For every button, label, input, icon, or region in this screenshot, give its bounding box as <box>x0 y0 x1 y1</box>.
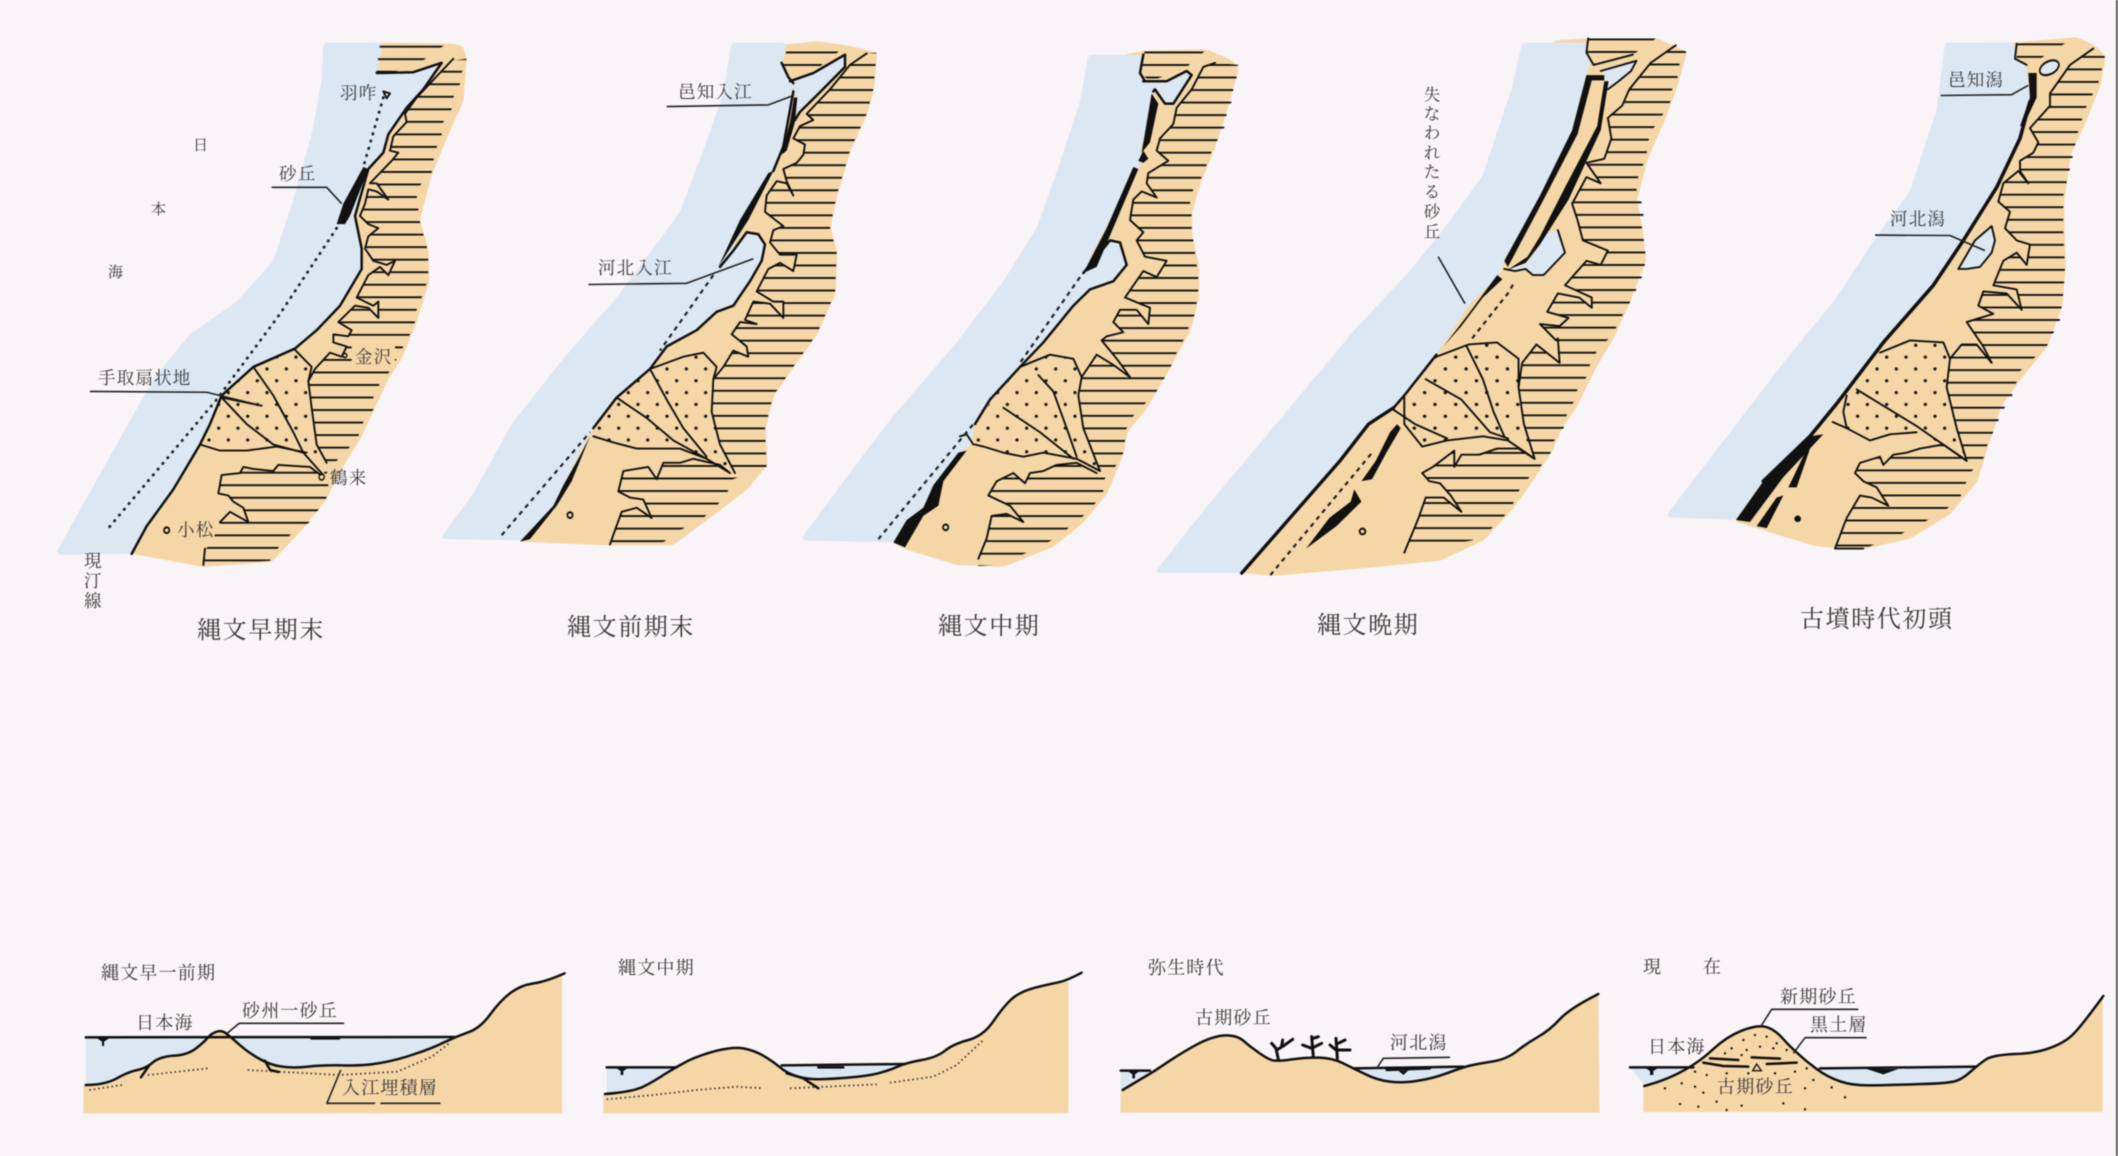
sea <box>800 55 1153 542</box>
coastline <box>1763 102 2030 481</box>
artifact triangle <box>1753 1064 1761 1071</box>
land <box>507 41 877 545</box>
sand dunes <box>1736 434 1823 522</box>
coastline and lagoon outline <box>593 55 845 428</box>
place labels: 手取扇状地 <box>98 368 192 388</box>
sea <box>55 42 442 555</box>
section labels: 現 <box>1643 957 1662 977</box>
panel: section 縄文早一前期 <box>83 963 565 1113</box>
fan: 手取扇状地 <box>593 353 735 473</box>
section labels: 新期砂丘 <box>1780 987 1857 1007</box>
land <box>1643 997 2103 1112</box>
section labels: 入江埋積層 <box>342 1078 438 1098</box>
section labels: 河北潟 <box>1390 1033 1448 1053</box>
town marker <box>567 512 573 518</box>
present shoreline <box>878 277 1080 539</box>
map drawing <box>1154 38 1687 576</box>
land <box>603 982 1068 1113</box>
water surface <box>1121 1067 1463 1071</box>
section labels: 在 <box>1703 957 1722 977</box>
fan boundary and rivers <box>1833 340 1967 461</box>
section labels: 古期砂丘 <box>1195 1008 1272 1028</box>
lake sediment <box>1867 1069 1898 1074</box>
place labels: 河北潟 <box>1890 209 1946 229</box>
lagoon outline <box>1958 226 1995 269</box>
present shoreline <box>1270 281 1515 575</box>
land <box>1733 37 2106 549</box>
section labels: 砂州一砂丘 <box>242 1001 338 1021</box>
place labels <box>598 82 753 278</box>
map drawing <box>1665 37 2106 549</box>
land <box>83 974 562 1113</box>
town marker <box>1360 529 1365 534</box>
hatching: hills <box>782 42 847 75</box>
inner hill boundary <box>308 59 453 381</box>
section drawing <box>603 973 1082 1113</box>
sea label 日本海 <box>108 137 208 281</box>
vertical label 失なわれたる砂丘: な <box>1424 104 1440 124</box>
label 現汀線 <box>84 551 103 611</box>
panel: map 縄文晩期 <box>1154 38 1687 639</box>
inner hill boundary <box>713 53 867 379</box>
water <box>1630 1067 1978 1086</box>
section label: 縄文中期 <box>618 958 695 978</box>
lagoon: 河北潟 <box>1958 226 1995 269</box>
place labels <box>98 83 392 540</box>
fan: 手取扇状地 <box>1404 342 1535 459</box>
place labels <box>1890 70 2004 229</box>
place labels: 小松 <box>177 520 214 540</box>
section labels: 弥生時代 <box>1148 958 1225 978</box>
hatching: hills <box>1586 38 1656 65</box>
panel: section 現在 <box>1630 957 2103 1112</box>
fan boundary and rivers <box>1394 342 1535 459</box>
coastline <box>1242 408 1394 573</box>
hatching: hills <box>376 44 447 74</box>
sea <box>440 42 793 540</box>
sand dunes <box>718 171 773 267</box>
fan: 手取扇状地 <box>1843 340 1967 461</box>
fan: 手取扇状地 <box>975 355 1100 471</box>
leader lines <box>1875 85 2028 251</box>
sea level marker <box>97 1038 109 1046</box>
town marker <box>943 524 948 530</box>
fan boundary and rivers <box>200 350 327 475</box>
coastline and lagoon outline <box>975 55 1192 424</box>
arrow <box>1438 257 1465 304</box>
lagoons <box>1601 61 1636 89</box>
lagoon: 邑知潟 <box>2038 57 2061 78</box>
profile <box>605 973 1082 1094</box>
vertical label 失なわれたる砂丘 <box>1424 86 1441 242</box>
fan: 手取扇状地 <box>200 351 327 463</box>
sand dunes <box>893 451 967 547</box>
section drawing <box>1121 994 1599 1113</box>
leader lines <box>588 96 793 284</box>
sand dots <box>1664 1034 1846 1111</box>
map drawing <box>55 42 467 567</box>
land <box>1242 38 1687 576</box>
lagoon outline <box>1504 38 1636 275</box>
place labels: 砂丘 <box>279 164 316 184</box>
profile <box>1644 996 2103 1086</box>
section drawing <box>1630 996 2103 1112</box>
label 現汀線: 現 <box>84 551 103 571</box>
place labels: 金沢 <box>355 347 392 367</box>
inner hill boundary <box>1950 49 2093 363</box>
town markers <box>383 91 390 98</box>
panel: map 古墳時代初頭 <box>1665 37 2106 633</box>
lagoon: 邑知入江 <box>1143 71 1192 104</box>
land <box>132 42 467 567</box>
sand dunes <box>1444 275 1502 347</box>
buried layer <box>89 1043 449 1090</box>
lake sediment <box>1387 1068 1430 1070</box>
water <box>607 1064 905 1095</box>
water surface <box>607 1064 905 1067</box>
land <box>873 49 1239 567</box>
map drawing <box>800 49 1239 567</box>
place labels: 河北入江 <box>598 258 673 278</box>
buried layer <box>607 1040 983 1099</box>
vertical label 失なわれたる砂丘: れ <box>1424 144 1441 162</box>
fan boundary and rivers <box>593 353 735 473</box>
sea level marker <box>1646 1068 1657 1075</box>
leader lines <box>90 187 342 406</box>
profile <box>86 973 565 1085</box>
hatching: hills <box>2017 38 2073 59</box>
sea level marker <box>617 1068 627 1075</box>
present shoreline <box>502 275 713 535</box>
vertical label 失なわれたる砂丘: る <box>1424 182 1440 202</box>
town marker <box>1794 516 1801 522</box>
sea label 日本海: 日 <box>193 137 208 154</box>
label 現汀線: 線 <box>84 591 103 611</box>
title: 縄文早期末 <box>197 617 325 644</box>
place labels: 羽咋 <box>340 83 377 103</box>
place labels: 鶴来 <box>330 468 367 488</box>
label 現汀線: 汀 <box>84 571 103 591</box>
title: 縄文中期 <box>938 613 1040 640</box>
panel: map 縄文早期末 <box>55 42 467 644</box>
sand dune <box>337 167 368 224</box>
panel: map 縄文中期 <box>800 49 1239 640</box>
panel: section 弥生時代 <box>1121 958 1599 1113</box>
section drawing <box>83 973 565 1113</box>
panel: map 縄文前期末 <box>440 41 877 641</box>
water surface <box>1630 1067 1977 1068</box>
title: 縄文晩期 <box>1317 612 1419 639</box>
sea label 日本海: 本 <box>151 201 166 218</box>
leader lines <box>1762 1009 1867 1053</box>
hatching: hills <box>1140 49 1207 81</box>
water surface <box>86 1036 454 1039</box>
section labels: 黒土層 <box>1810 1015 1868 1035</box>
sea <box>1665 42 2030 520</box>
leader lines <box>227 1023 441 1103</box>
title: 縄文前期末 <box>567 614 695 641</box>
water <box>1121 1071 1153 1092</box>
place labels: 邑知潟 <box>1948 70 2004 90</box>
present shoreline <box>107 98 383 530</box>
dark soil layers <box>1703 1057 1797 1067</box>
section labels: 縄文早一前期 <box>101 963 216 983</box>
section labels: 日本海 <box>1648 1037 1706 1057</box>
water <box>86 1037 454 1087</box>
title: 古墳時代初頭 <box>1800 606 1954 633</box>
vertical label 失なわれたる砂丘: 失 <box>1424 86 1440 104</box>
section labels: 日本海 <box>136 1013 194 1033</box>
inner hill boundary <box>1082 63 1215 377</box>
sea label 日本海: 海 <box>108 264 123 281</box>
section labels <box>1148 958 1448 1053</box>
label background <box>352 344 395 369</box>
land <box>1121 994 1599 1113</box>
panel: section 縄文中期 <box>603 958 1082 1113</box>
lagoon: 邑知入江 <box>790 55 845 120</box>
sea level marker <box>1128 1072 1139 1078</box>
profile <box>1123 994 1598 1090</box>
section labels <box>1643 957 1868 1097</box>
stub <box>787 1067 843 1088</box>
leader line <box>1377 1057 1450 1068</box>
vertical label 失なわれたる砂丘: 砂 <box>1424 202 1441 222</box>
stubs <box>141 1038 339 1077</box>
vertical label 失なわれたる砂丘: 丘 <box>1424 222 1440 242</box>
vertical label 失なわれたる砂丘: わ <box>1424 124 1440 142</box>
fan boundary and rivers <box>960 355 1100 471</box>
place labels: 邑知入江 <box>678 82 753 102</box>
coastline <box>132 63 442 554</box>
section labels <box>101 963 438 1098</box>
vertical label 失なわれたる砂丘: た <box>1424 162 1440 182</box>
trees <box>1272 1037 1350 1059</box>
section labels: 古期砂丘 <box>1717 1077 1794 1097</box>
inner hill boundary <box>1519 45 1676 387</box>
map drawing <box>440 41 877 545</box>
sea <box>1154 42 1590 573</box>
